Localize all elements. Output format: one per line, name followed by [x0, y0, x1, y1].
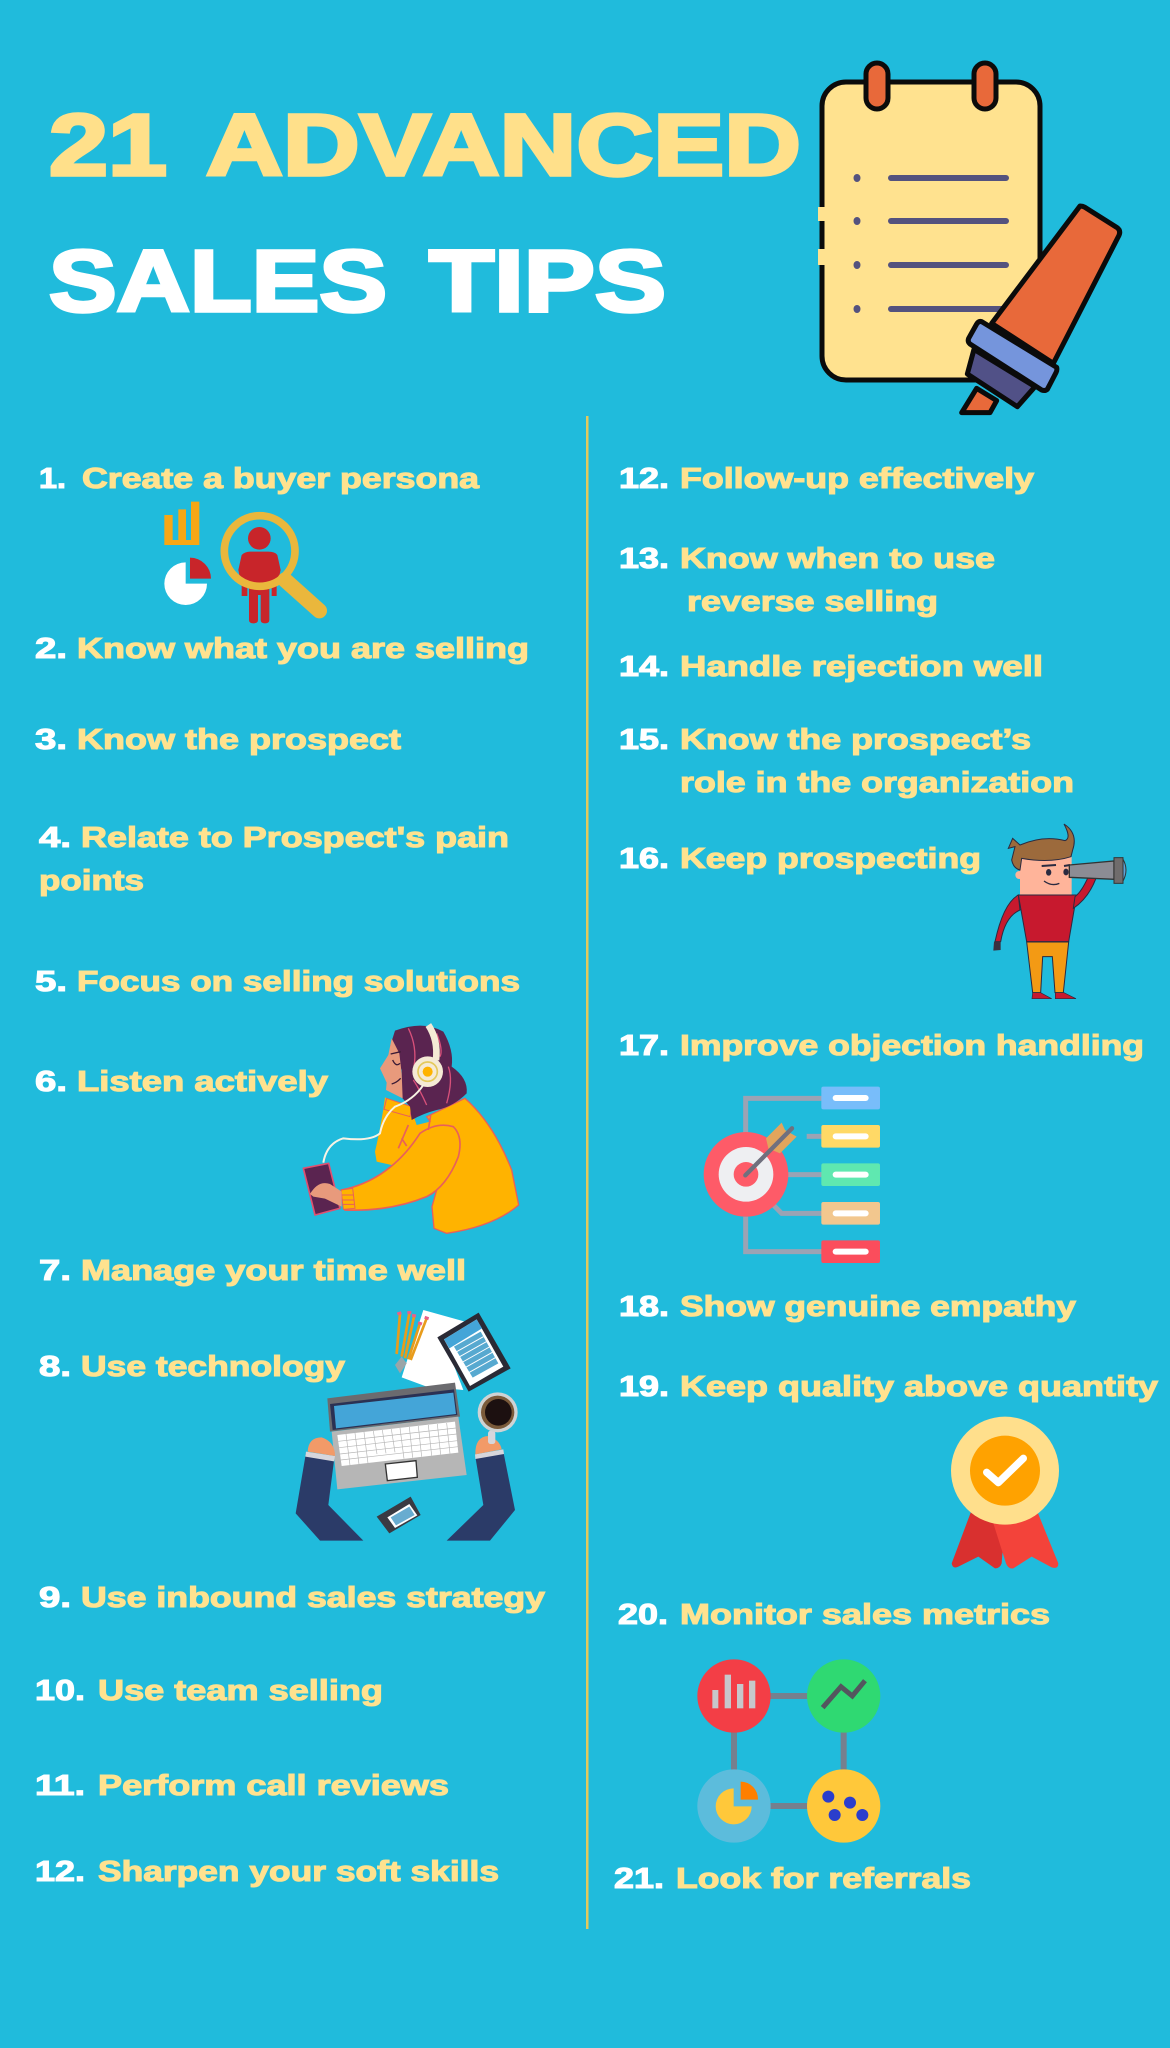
- tip 9: 9.: [39, 1582, 71, 1614]
- title: TIPS: [429, 233, 666, 330]
- tip 16: [619, 843, 981, 875]
- tip 10: 10.: [35, 1675, 85, 1707]
- tip 4: 4.: [39, 822, 71, 854]
- icon: target flow: [704, 1087, 880, 1263]
- tip 17: 17.: [619, 1030, 669, 1062]
- tip 11: Perform call reviews: [98, 1770, 449, 1802]
- tip 19: Keep quality above quantity: [680, 1371, 1158, 1403]
- tip 10: [35, 1675, 383, 1707]
- tip 13: reverse selling: [687, 586, 938, 618]
- tip 14: 14.: [619, 651, 669, 683]
- tip 13: 13.: [619, 543, 669, 575]
- tip 12 left: Sharpen your soft skills: [98, 1856, 499, 1888]
- tip 4: points: [39, 865, 144, 897]
- tip 6: [35, 1066, 328, 1098]
- tip 21: 21.: [614, 1863, 664, 1895]
- tip 10: Use team selling: [98, 1675, 383, 1707]
- tip 20: 20.: [618, 1599, 668, 1631]
- tip 14: Handle rejection well: [680, 651, 1043, 683]
- tip 12 right: 12.: [619, 463, 669, 495]
- tip 6: 6.: [35, 1066, 67, 1098]
- tip 13: [619, 543, 995, 618]
- title: SALES: [49, 233, 387, 330]
- title: [49, 97, 801, 330]
- tip 5: Focus on selling solutions: [77, 966, 520, 998]
- tip 8: Use technology: [81, 1351, 345, 1383]
- icon: notepad and marker: [818, 63, 1120, 413]
- tip 4: [39, 822, 509, 897]
- tip 14: [619, 651, 1043, 683]
- tip 12 right: [619, 463, 1034, 495]
- tip 12 right: Follow-up effectively: [680, 463, 1034, 495]
- tip 17: Improve objection handling: [680, 1030, 1144, 1062]
- title: ADVANCED: [206, 97, 801, 194]
- icon: buyer persona magnifier: [164, 502, 319, 623]
- icon: metrics network: [697, 1659, 880, 1843]
- tip 3: Know the prospect: [77, 724, 401, 756]
- tip 15: 15.: [619, 724, 669, 756]
- tip 15: [619, 724, 1074, 799]
- icon: woman with headphones: [303, 1025, 519, 1233]
- tip 2: Know what you are selling: [77, 633, 529, 665]
- tip 3: 3.: [35, 724, 67, 756]
- tip 19: 19.: [619, 1371, 669, 1403]
- tip 4: Relate to Prospect's pain: [81, 822, 509, 854]
- tip 18: 18.: [619, 1291, 669, 1323]
- tip 15: role in the organization: [680, 767, 1074, 799]
- tip 5: 5.: [35, 966, 67, 998]
- icon: man with telescope: [993, 824, 1126, 999]
- tip 11: 11.: [35, 1770, 85, 1802]
- tip 1: 1.: [39, 463, 66, 495]
- tip 12 left: 12.: [35, 1856, 85, 1888]
- tip 7: Manage your time well: [81, 1255, 466, 1287]
- tip 15: Know the prospect’s: [680, 724, 1031, 756]
- tip 16: 16.: [619, 843, 669, 875]
- tip 8: 8.: [39, 1351, 71, 1383]
- tip 6: Listen actively: [77, 1066, 328, 1098]
- tip 21: [614, 1863, 971, 1895]
- tip 21: Look for referrals: [676, 1863, 971, 1895]
- tip 9: Use inbound sales strategy: [81, 1582, 545, 1614]
- icon: laptop desk: [296, 1310, 518, 1541]
- tip 20: [618, 1599, 1050, 1631]
- tip 11: [35, 1770, 449, 1802]
- tip 20: Monitor sales metrics: [680, 1599, 1050, 1631]
- divider: [586, 416, 588, 1929]
- tip 13: Know when to use: [680, 543, 995, 575]
- tip 1: Create a buyer persona: [82, 463, 480, 495]
- tip 7: 7.: [39, 1255, 71, 1287]
- title: 21: [49, 97, 167, 194]
- tip 16: Keep prospecting: [680, 843, 981, 875]
- tip 2: 2.: [35, 633, 67, 665]
- tip 18: Show genuine empathy: [680, 1291, 1076, 1323]
- icon: medal: [951, 1417, 1059, 1568]
